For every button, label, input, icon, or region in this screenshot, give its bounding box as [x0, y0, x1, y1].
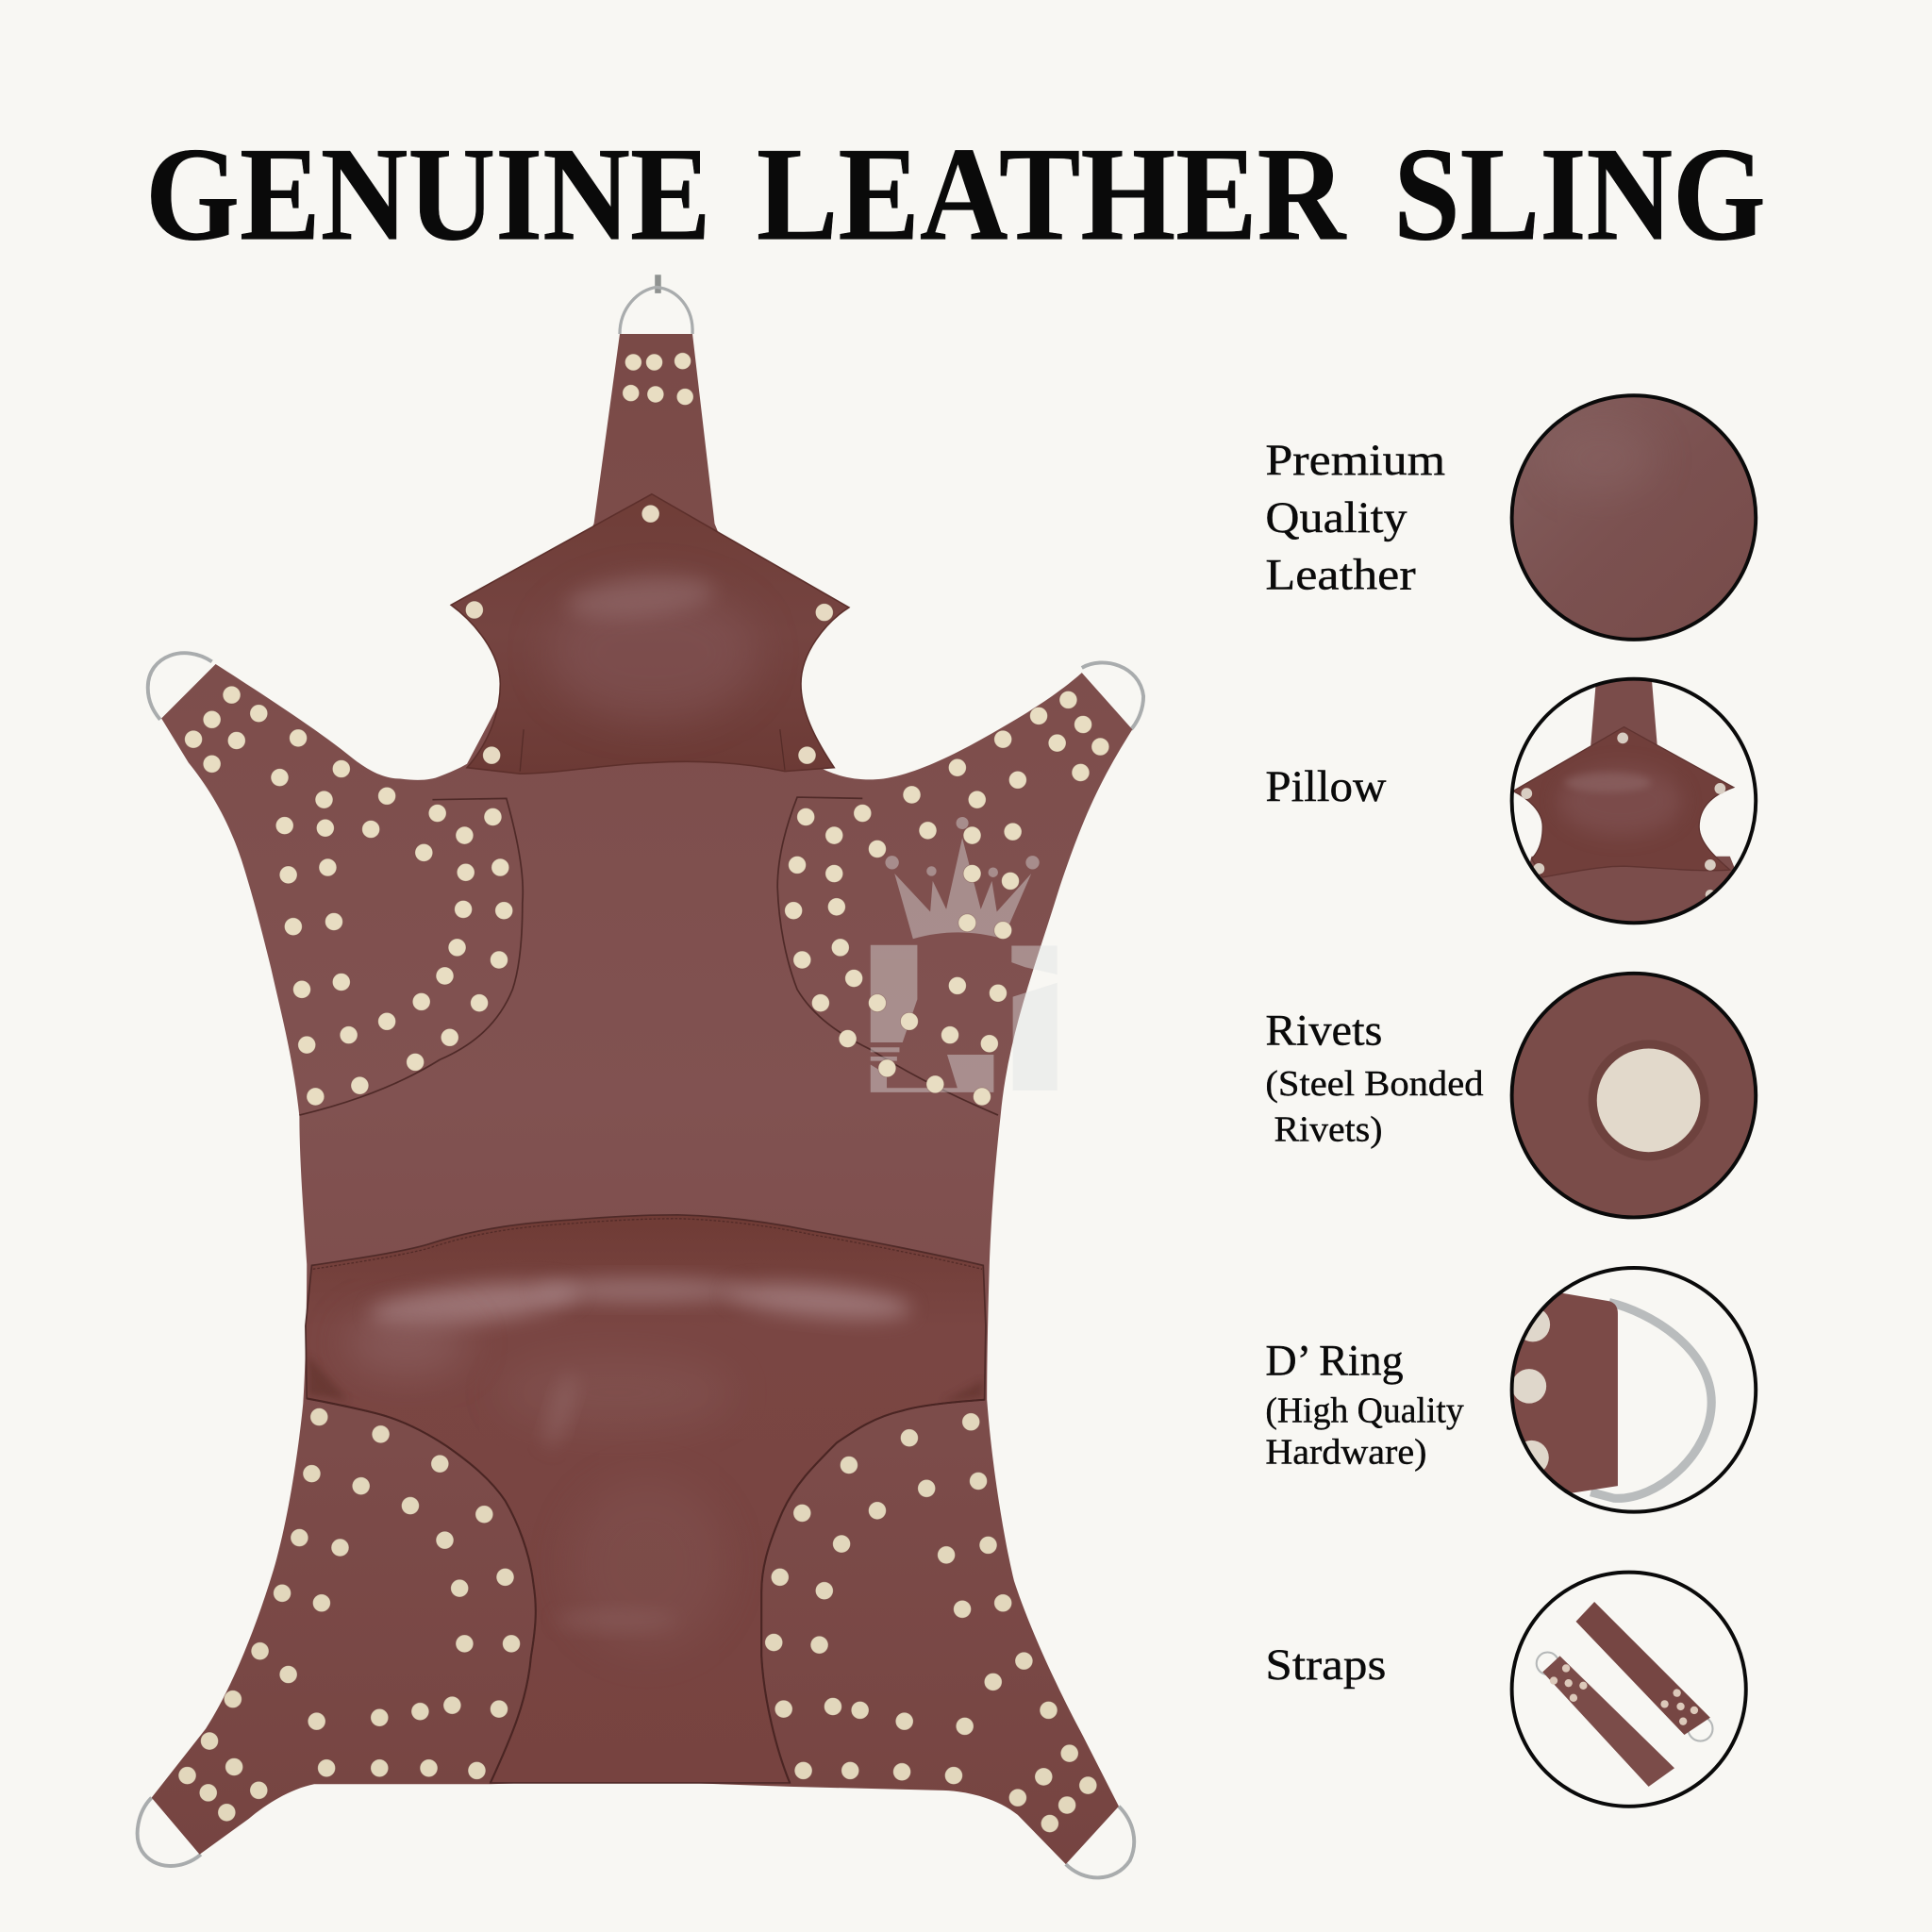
lower left D ring: [138, 1798, 201, 1866]
feature: straps: [1265, 1573, 1746, 1807]
lower left panel seam: [307, 1398, 536, 1783]
label: Rivets: [1265, 1007, 1382, 1056]
label: [1265, 1007, 1484, 1149]
feature: rivets: [1265, 973, 1757, 1219]
title: [145, 119, 1766, 268]
label: [1265, 1337, 1464, 1473]
feature: pillow: [1265, 672, 1762, 937]
label: Rivets): [1274, 1109, 1382, 1149]
D ring detail circle: [1503, 1267, 1757, 1513]
rivets: lower right panel: [765, 1413, 1097, 1832]
rivets: top strap: [623, 353, 693, 405]
label: Quality: [1265, 493, 1407, 542]
crown: [894, 838, 1031, 939]
lower right D ring: [1066, 1807, 1134, 1877]
title: LEATHER: [757, 119, 1347, 268]
pillow highlight: [565, 570, 716, 625]
head pillow: [451, 494, 849, 774]
main product: leather sling: [138, 275, 1143, 1877]
label: D’ Ring: [1265, 1337, 1404, 1386]
sling body: [152, 334, 1132, 1864]
cushion highlights: [308, 1274, 983, 1651]
upper strap: [1576, 1602, 1713, 1741]
lower right panel seam: [761, 1400, 985, 1783]
letter I: [1011, 945, 1058, 1091]
rivets: upper left panel: [185, 686, 513, 1106]
label: Leather: [1265, 550, 1416, 599]
cushion stitching: [313, 1219, 982, 1269]
left D ring: [148, 653, 212, 720]
title: GENUINE: [145, 119, 711, 268]
padded seat cushion: [306, 1215, 986, 1783]
rivets: upper right panel: [785, 691, 1109, 1106]
upper right panel seam: [777, 797, 998, 1115]
rivets: pillow: [465, 505, 833, 764]
watermark logo: [871, 817, 1058, 1092]
feature: D ring: [1265, 1267, 1757, 1513]
pillow inner seams: [520, 729, 785, 772]
label: Straps: [1265, 1641, 1386, 1690]
label: (Steel Bonded: [1265, 1064, 1484, 1104]
straps detail circle: [1512, 1573, 1746, 1807]
label: Premium: [1265, 436, 1445, 485]
hanging hook: [655, 275, 661, 293]
label: (High Quality: [1265, 1391, 1464, 1430]
label: Hardware): [1265, 1433, 1426, 1473]
leather swatch circle: [1510, 394, 1757, 641]
right D ring: [1082, 662, 1143, 729]
title: SLING: [1393, 119, 1766, 268]
upper left panel seam: [299, 798, 523, 1115]
rivets: lower left panel: [178, 1408, 520, 1822]
top D ring: [620, 287, 692, 334]
label: Pillow: [1265, 762, 1386, 811]
feature: premium quality leather: [1265, 394, 1757, 641]
pillow soft light: [548, 585, 758, 721]
lower strap: [1537, 1653, 1674, 1787]
crown balls: [885, 817, 1040, 877]
rivet detail circle: [1510, 973, 1757, 1219]
pillow detail circle: [1510, 672, 1762, 937]
label: [1265, 436, 1445, 599]
letter L: [871, 945, 993, 1092]
